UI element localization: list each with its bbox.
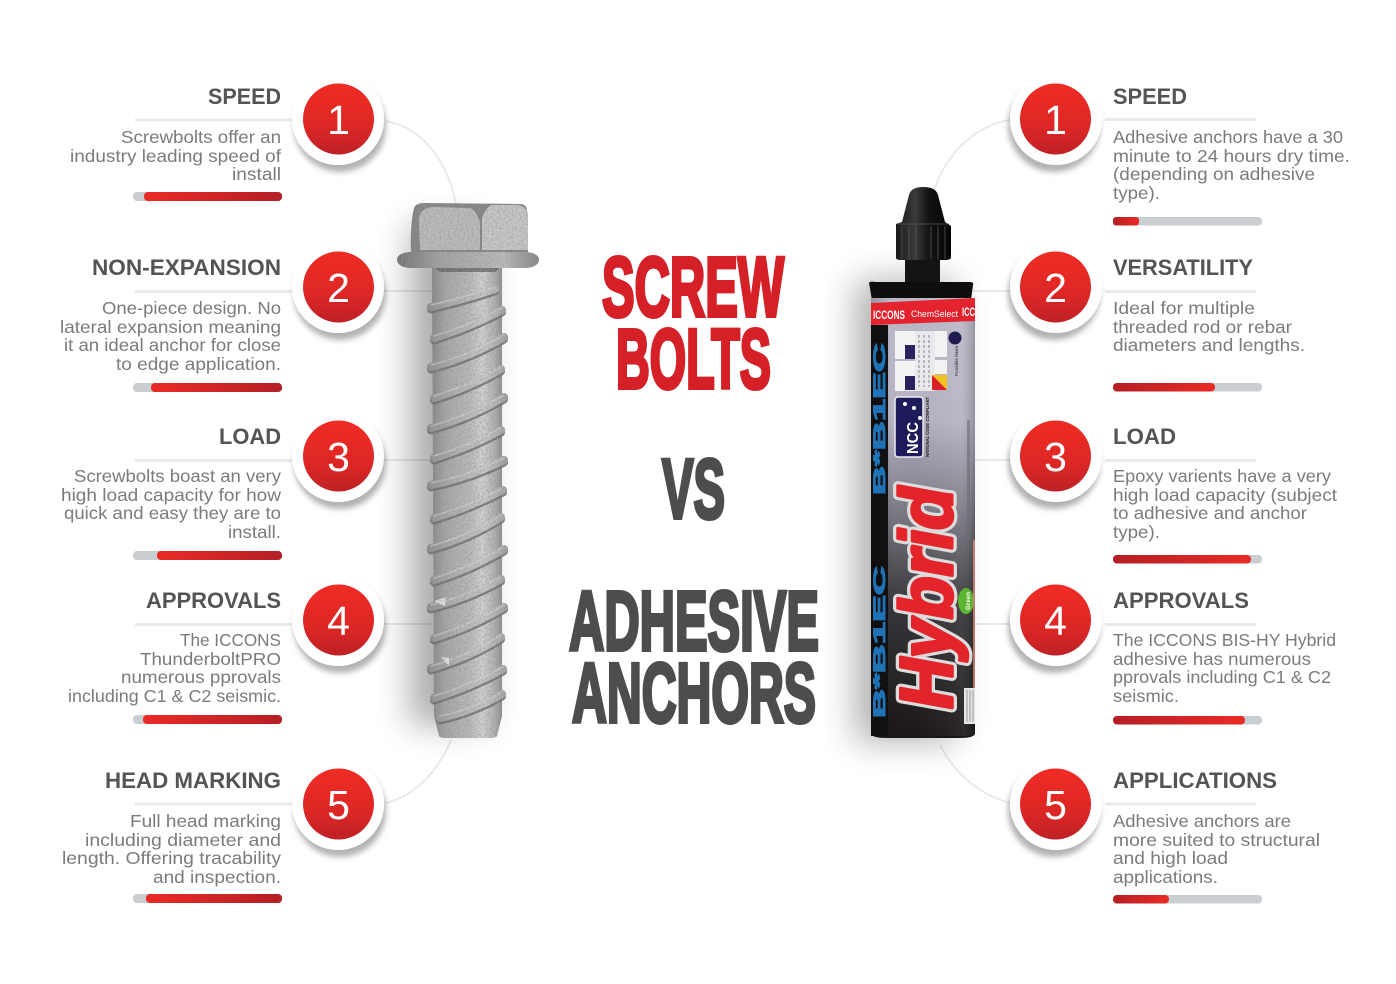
badge right 4: 4 [1044,598,1067,644]
nozzle cap [869,187,973,300]
item 1 speed: install [232,164,281,184]
badge left 5 [292,758,384,850]
item 2 non-expansion: NON-EXPANSION [92,255,281,280]
item 4 approvals: numerous pprovals [121,667,281,687]
item 5 applications [1105,768,1320,904]
heading adhesive: ADHESIVE [569,574,819,668]
badge left 3: 3 [327,434,350,480]
red band: ICC [962,305,975,319]
connector lines [383,119,1014,804]
item 2 versatility: threaded rod or rebar [1113,317,1292,337]
item 4 approvals: APPROVALS [1113,588,1249,613]
item 2 non-expansion: it an ideal anchor for close [64,335,281,355]
red band [871,298,975,325]
NCC badge: NATIONAL CODE COMPLIANT [925,397,930,457]
item 5 head marking [62,768,292,903]
item 4 approvals [1105,588,1336,724]
item 4 approvals: ThunderboltPRO [140,649,281,669]
item 3 load: LOAD [219,424,281,449]
blue side text: B*B1EC [870,566,889,718]
number badges [292,73,1102,850]
item 1 speed: (depending on adhesive [1113,164,1315,184]
heading screw: SCREW [602,240,784,334]
panel: screw bolts left column [60,84,292,903]
badge left 2 [292,241,384,333]
compliance labels [895,331,962,391]
item 5 head marking: HEAD MARKING [105,768,281,793]
item 1 speed [70,84,292,201]
item 1 speed: Screwbolts offer an [121,127,281,147]
item 5 applications: more suited to structural [1113,830,1320,850]
item 2 non-expansion: lateral expansion meaning [60,317,281,337]
item 3 load: high load capacity (subject [1113,485,1337,505]
item 5 head marking: and inspection. [153,867,281,887]
item 2 versatility: Ideal for multiple [1113,298,1255,318]
item 4 approvals: pprovals including C1 & C2 [1113,667,1331,687]
red band: ICCONS [873,308,905,322]
item 3 load: type). [1113,522,1160,542]
item 4 approvals: including C1 & C2 seismic. [68,686,281,706]
badge right 1 [1010,73,1102,165]
item 3 load: Screwbolts boast an very [74,466,281,486]
blue side text [870,343,889,718]
item 3 load: quick and easy they are to [64,503,281,523]
heading anchors: ANCHORS [572,646,816,740]
illustration: adhesive cartridge [855,187,975,742]
badge left 1 [292,73,384,165]
badge left 4: 4 [327,598,350,644]
item 3 load: LOAD [1113,424,1176,449]
badge right 4 [1010,574,1102,666]
cartridge body [871,298,975,738]
badge left 2: 2 [327,265,350,311]
item 3 load: high load capacity for how [61,485,281,505]
item 5 head marking: Full head marking [130,811,281,831]
Hybrid logo: Hybrid [885,485,968,709]
item 1 speed: SPEED [208,84,281,109]
badge left 1: 1 [327,97,350,143]
item 2 versatility: diameters and lengths. [1113,335,1305,355]
NCC badge: NCC [905,422,922,454]
item 1 speed: type). [1113,183,1160,203]
badge right 2 [1010,241,1102,333]
badge right 5 [1010,758,1102,850]
item 1 speed: industry leading speed of [70,146,281,166]
item 1 speed: Adhesive anchors have a 30 [1113,127,1343,147]
item 1 speed [1105,84,1350,226]
badge right 1: 1 [1044,97,1067,143]
item 2 versatility: VERSATILITY [1113,255,1253,280]
badge right 5: 5 [1044,782,1067,828]
item 1 speed: minute to 24 hours dry time. [1113,146,1350,166]
item 3 load: Epoxy varients have a very [1113,466,1331,486]
item 5 head marking: including diameter and [85,830,281,850]
item 5 applications: applications. [1113,867,1218,887]
green badge [958,588,974,614]
badge left 5: 5 [327,782,350,828]
badge right 3 [1010,410,1102,502]
badge right 2: 2 [1044,265,1067,311]
red band: ChemSelect [911,309,958,320]
compliance labels: Possible harm [954,346,959,376]
badge left 4 [292,574,384,666]
blue side text: B*B1EC [870,343,889,495]
item 2 non-expansion: to edge application. [116,354,281,374]
badge left 3 [292,410,384,502]
badge right 3: 3 [1044,434,1067,480]
item 3 load: to adhesive and anchor [1113,503,1307,523]
item 5 applications: and high load [1113,848,1228,868]
item 4 approvals: APPROVALS [146,588,281,613]
item 4 approvals: The ICCONS BIS-HY Hybrid [1113,630,1336,650]
item 5 applications: Adhesive anchors are [1113,811,1291,831]
item 4 approvals: The ICCONS [180,630,281,650]
item 5 head marking: length. Offering tracability [62,848,281,868]
item 3 load [1105,424,1337,564]
panel: adhesive anchors right column [1105,84,1350,904]
Hybrid logo: Hybrid [885,485,968,709]
item 3 load [61,424,292,560]
item 2 versatility [1105,255,1305,392]
item 4 approvals: adhesive has numerous [1113,649,1311,669]
heading bolts: BOLTS [616,312,771,406]
NCC badge [895,397,930,457]
heading vs: VS [662,442,725,536]
illustration: screw bolt [397,203,539,738]
title: screw bolts vs adhesive anchors [569,240,819,740]
item 4 approvals: seismic. [1113,686,1179,706]
item 1 speed: SPEED [1113,84,1187,109]
side strips and barcode [964,420,975,724]
green badge: Green [966,592,972,610]
item 4 approvals [68,588,292,724]
item 3 load: install. [228,522,281,542]
item 2 non-expansion [60,255,292,392]
item 2 non-expansion: One-piece design. No [102,298,281,318]
item 5 applications: APPLICATIONS [1113,768,1277,793]
